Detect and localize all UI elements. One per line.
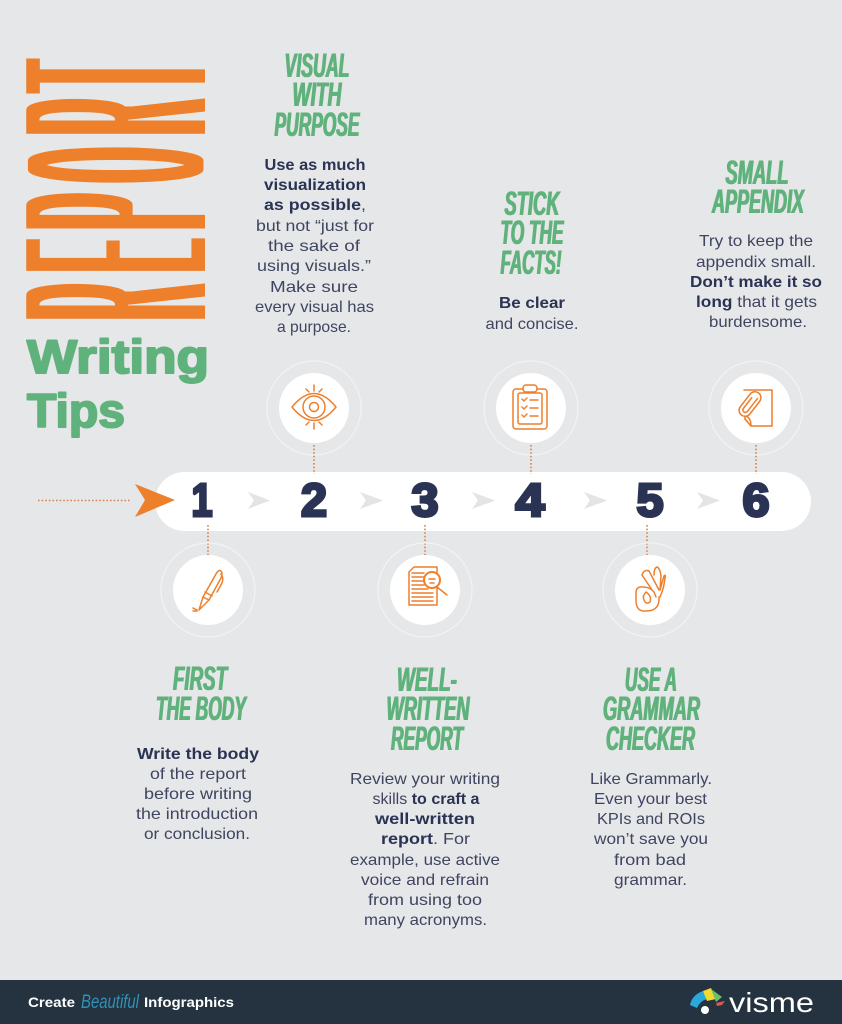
- icon: pen: [161, 543, 255, 637]
- step 3: text: [350, 771, 500, 929]
- step 1: heading: FIRST: [173, 660, 229, 698]
- step 5: text: [590, 771, 712, 889]
- step 6: heading: [711, 154, 805, 221]
- footer bar: [0, 980, 842, 1024]
- step 3: heading: WELL-: [397, 661, 457, 699]
- footer tagline: Create: [28, 994, 75, 1010]
- step 3: text: many acronyms.: [364, 912, 487, 929]
- icon: document with magnifier: [378, 543, 472, 637]
- grey chevrons: [248, 492, 720, 509]
- step numbers: 3: [412, 474, 438, 526]
- step 4: heading: [500, 185, 564, 282]
- step 6: text: burdensome.: [709, 314, 807, 331]
- step 2: text: using visuals.”: [257, 258, 371, 275]
- step 2: text: the sake of: [268, 238, 361, 255]
- footer tagline: Infographics: [144, 994, 234, 1010]
- step numbers: 6: [742, 474, 770, 526]
- icon: clipboard: [484, 361, 578, 455]
- step 2: heading: PURPOSE: [274, 106, 360, 144]
- step 2: text: Make sure: [270, 279, 358, 296]
- step 1: text: before writing: [144, 786, 252, 803]
- step 1: text: the introduction: [136, 806, 258, 823]
- step 1: text: of the report: [150, 766, 247, 783]
- step 2: text: as possible ,: [264, 197, 366, 214]
- subtitle: Writing Tips: Writing: [27, 330, 209, 383]
- step 5: text: Like Grammarly.: [590, 771, 712, 788]
- step 1: text: Write the body: [137, 746, 259, 763]
- step 2: text: Use as much: [264, 157, 366, 174]
- step 4: heading: STICK: [504, 185, 561, 223]
- step numbers: 4: [516, 474, 545, 526]
- subtitle: Writing Tips: [27, 330, 209, 437]
- step 1: text: or conclusion.: [144, 826, 250, 843]
- step 2: heading: [274, 47, 360, 144]
- step 3: text: from using too: [368, 892, 482, 909]
- step 3: text: example, use active: [350, 852, 500, 869]
- step 3: heading: REPORT: [391, 720, 465, 758]
- step 5: text: KPIs and ROIs: [597, 811, 705, 828]
- step 3: text: report . For: [381, 831, 471, 848]
- step 4: heading: TO THE: [500, 214, 564, 252]
- step 6: text: appendix small.: [696, 254, 816, 271]
- step 6: text: long that it gets: [696, 294, 817, 311]
- step 3: heading: WRITTEN: [386, 690, 470, 728]
- step 3: text: Review your writing: [350, 771, 500, 788]
- step 5: heading: CHECKER: [606, 720, 695, 758]
- step 6: text: [690, 233, 822, 331]
- step 2: heading: WITH: [292, 76, 342, 114]
- step 6: heading: SMALL: [726, 154, 788, 192]
- timeline bar: [155, 472, 811, 531]
- step 1: text: [136, 746, 259, 843]
- visme logo: visme: [729, 987, 814, 1018]
- step numbers: 2: [301, 474, 327, 526]
- step 4: text: [486, 295, 578, 333]
- step 6: text: Try to keep the: [699, 233, 813, 250]
- step 5: text: Even your best: [594, 791, 708, 808]
- icon: paperclip document: [709, 361, 803, 455]
- step 1: heading: [156, 660, 248, 728]
- step 3: heading: [386, 661, 470, 758]
- step 5: text: from bad: [614, 852, 686, 869]
- icon: OK hand: [603, 543, 697, 637]
- step 5: heading: GRAMMAR: [603, 690, 700, 728]
- step numbers: 1: [192, 474, 212, 526]
- step 2: text: every visual has: [255, 299, 374, 316]
- step 5: text: grammar.: [614, 872, 687, 889]
- step 6: text: Don’t make it so: [690, 274, 822, 291]
- step 4: text: Be clear: [499, 295, 565, 312]
- step 3: text: well-written: [374, 811, 475, 828]
- step 5: heading: [603, 661, 700, 758]
- footer tagline: Beautiful: [81, 992, 140, 1013]
- dotted lead-in line: [38, 500, 130, 502]
- connector lines: [208, 445, 756, 555]
- step numbers: [192, 474, 770, 526]
- visme logo: [690, 987, 814, 1018]
- step 2: text: [255, 157, 375, 336]
- step 1: heading: THE BODY: [156, 690, 248, 728]
- subtitle: Writing Tips: Tips: [27, 384, 125, 437]
- step 2: text: but not “just for: [256, 218, 375, 235]
- step 5: heading: USE A: [625, 661, 677, 699]
- step 5: text: won’t save you: [593, 831, 708, 848]
- orange start arrow: [135, 484, 175, 517]
- step numbers: 5: [636, 474, 664, 526]
- step 4: text: and concise.: [486, 316, 578, 333]
- step 3: text: skills to craft a: [372, 791, 480, 808]
- footer tagline: [28, 992, 234, 1013]
- step 2: text: visualization: [264, 177, 366, 194]
- step 3: text: voice and refrain: [361, 872, 489, 889]
- step 4: heading: FACTS!: [500, 244, 562, 282]
- icon: eye: [267, 361, 361, 455]
- step 2: heading: VISUAL: [284, 47, 350, 85]
- step 2: text: a purpose.: [277, 319, 351, 336]
